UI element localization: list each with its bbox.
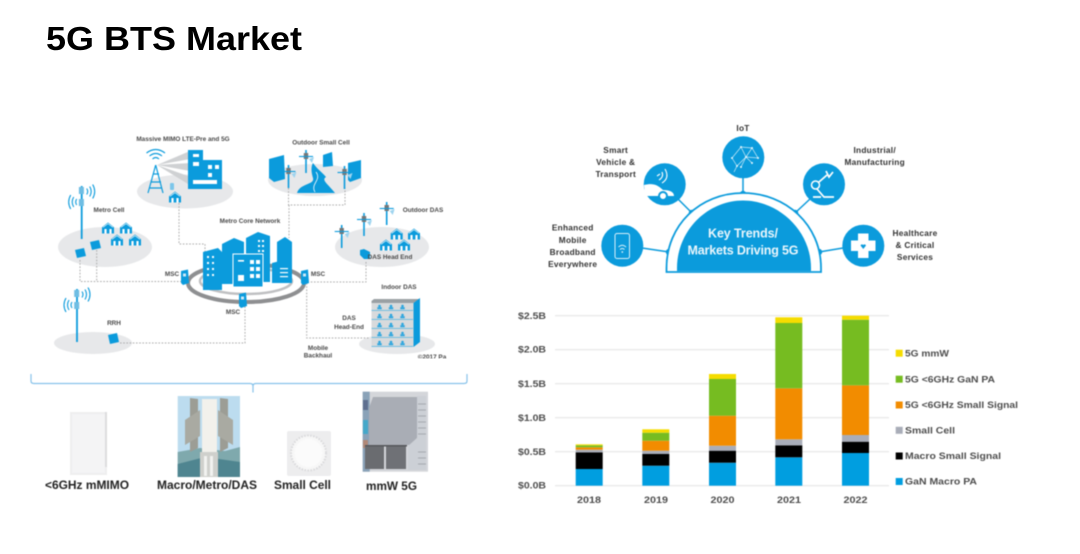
x axis labels	[577, 495, 868, 505]
trend labels: & Critical	[896, 240, 934, 250]
trend labels: Transport	[595, 169, 636, 179]
trend labels	[548, 123, 938, 269]
bar: 2021	[775, 317, 802, 486]
trend labels: Industrial/	[853, 145, 896, 155]
y axis labels: $0.0B	[518, 480, 546, 490]
x axis labels: 2021	[777, 495, 801, 505]
site labels: Massive MIMO LTE-Pre and 5G	[136, 136, 230, 143]
trend labels: Mobile	[559, 235, 587, 245]
product captions: mmW 5G	[366, 479, 417, 493]
outdoor DAS site	[335, 202, 420, 259]
icon: industrial robot arm	[803, 163, 845, 205]
product: sub-6GHz mMIMO panel	[70, 412, 107, 475]
MSC labels	[165, 271, 325, 316]
legend: Small Cell	[905, 425, 955, 435]
site labels	[94, 136, 447, 361]
site labels: ©2017 Pa	[418, 353, 447, 361]
y axis labels: $2.0B	[518, 344, 546, 354]
x axis labels: 2018	[577, 495, 601, 505]
MSC nodes	[181, 270, 309, 308]
massive MIMO site	[146, 150, 222, 202]
trend labels: Vehicle &	[596, 157, 635, 167]
legend: 5G <6GHz GaN PA	[905, 374, 996, 384]
dome	[666, 193, 821, 272]
bracket	[31, 374, 467, 392]
icon: smart vehicle	[644, 163, 686, 205]
product: mmW 5G unit photo	[363, 392, 428, 472]
legend: 5G mmW	[905, 348, 950, 358]
y axis labels: $2.5B	[518, 311, 546, 321]
site labels: DAS Head End	[368, 254, 412, 261]
x axis labels: 2022	[844, 495, 868, 505]
trend labels: Broadband	[550, 247, 596, 257]
dome caption: Key Trends/	[708, 226, 779, 240]
site labels: Metro Cell	[94, 207, 125, 214]
legend: Macro Small Signal	[905, 451, 1001, 461]
metro cell site	[69, 184, 141, 258]
icon: mobile broadband	[601, 225, 643, 267]
product captions: Macro/Metro/DAS	[157, 478, 257, 492]
trend labels: Services	[897, 252, 933, 262]
indoor DAS building	[372, 298, 420, 347]
trend labels: Everywhere	[548, 259, 597, 269]
site labels: RRH	[107, 320, 121, 327]
RRH site	[64, 288, 119, 344]
product: macro antenna photo	[178, 396, 240, 477]
connector spokes	[642, 178, 843, 254]
product captions: Small Cell	[274, 478, 331, 492]
site labels: Indoor DAS	[381, 284, 417, 291]
bar: 2022	[842, 316, 869, 486]
trend labels: IoT	[736, 123, 750, 133]
icon: healthcare cross	[842, 225, 884, 267]
network diagram	[54, 136, 447, 361]
x axis labels: 2019	[644, 495, 668, 505]
trend labels: Enhanced	[552, 222, 594, 232]
trend labels: Smart	[603, 145, 628, 155]
site labels: DAS	[342, 315, 356, 322]
core network buildings	[203, 232, 292, 290]
site labels: Mobile	[308, 345, 329, 352]
bar: 2019	[642, 429, 669, 486]
y axis labels: $1.0B	[518, 413, 546, 423]
chart gridlines	[555, 316, 889, 486]
product captions	[45, 478, 417, 493]
site labels: Head-End	[334, 324, 364, 331]
site labels: Outdoor DAS	[403, 207, 444, 214]
y axis labels: $0.5B	[518, 447, 546, 457]
legend	[896, 348, 1018, 487]
x axis labels: 2020	[710, 495, 735, 505]
MSC labels: MSC	[165, 271, 179, 278]
MSC labels: MSC	[226, 309, 240, 316]
icon: IoT	[722, 136, 764, 178]
dome caption: Markets Driving 5G	[688, 244, 798, 258]
key trends hub graphic	[548, 123, 938, 272]
y axis labels	[518, 311, 546, 490]
product: small cell	[287, 431, 331, 476]
stacked bar chart	[518, 311, 1018, 505]
legend: GaN Macro PA	[905, 477, 978, 487]
site labels: Metro Core Network	[220, 218, 281, 225]
core network ring	[188, 264, 304, 302]
bar: 2018	[576, 444, 603, 486]
trend labels: Manufacturing	[844, 157, 905, 167]
MSC labels: MSC	[311, 271, 325, 278]
legend: 5G <6GHz Small Signal	[905, 400, 1018, 410]
product captions: <6GHz mMIMO	[45, 478, 129, 492]
site labels: Backhaul	[304, 352, 332, 360]
dome caption	[688, 226, 798, 258]
trend labels: Healthcare	[893, 228, 938, 238]
y axis labels: $1.5B	[518, 379, 546, 389]
outdoor small cell site	[269, 150, 361, 193]
backhaul dotted links	[80, 188, 370, 343]
bar: 2020	[709, 374, 736, 486]
title: 5G BTS Market	[46, 21, 302, 58]
site labels: Outdoor Small Cell	[292, 140, 350, 146]
coverage zone ellipses	[54, 164, 435, 354]
